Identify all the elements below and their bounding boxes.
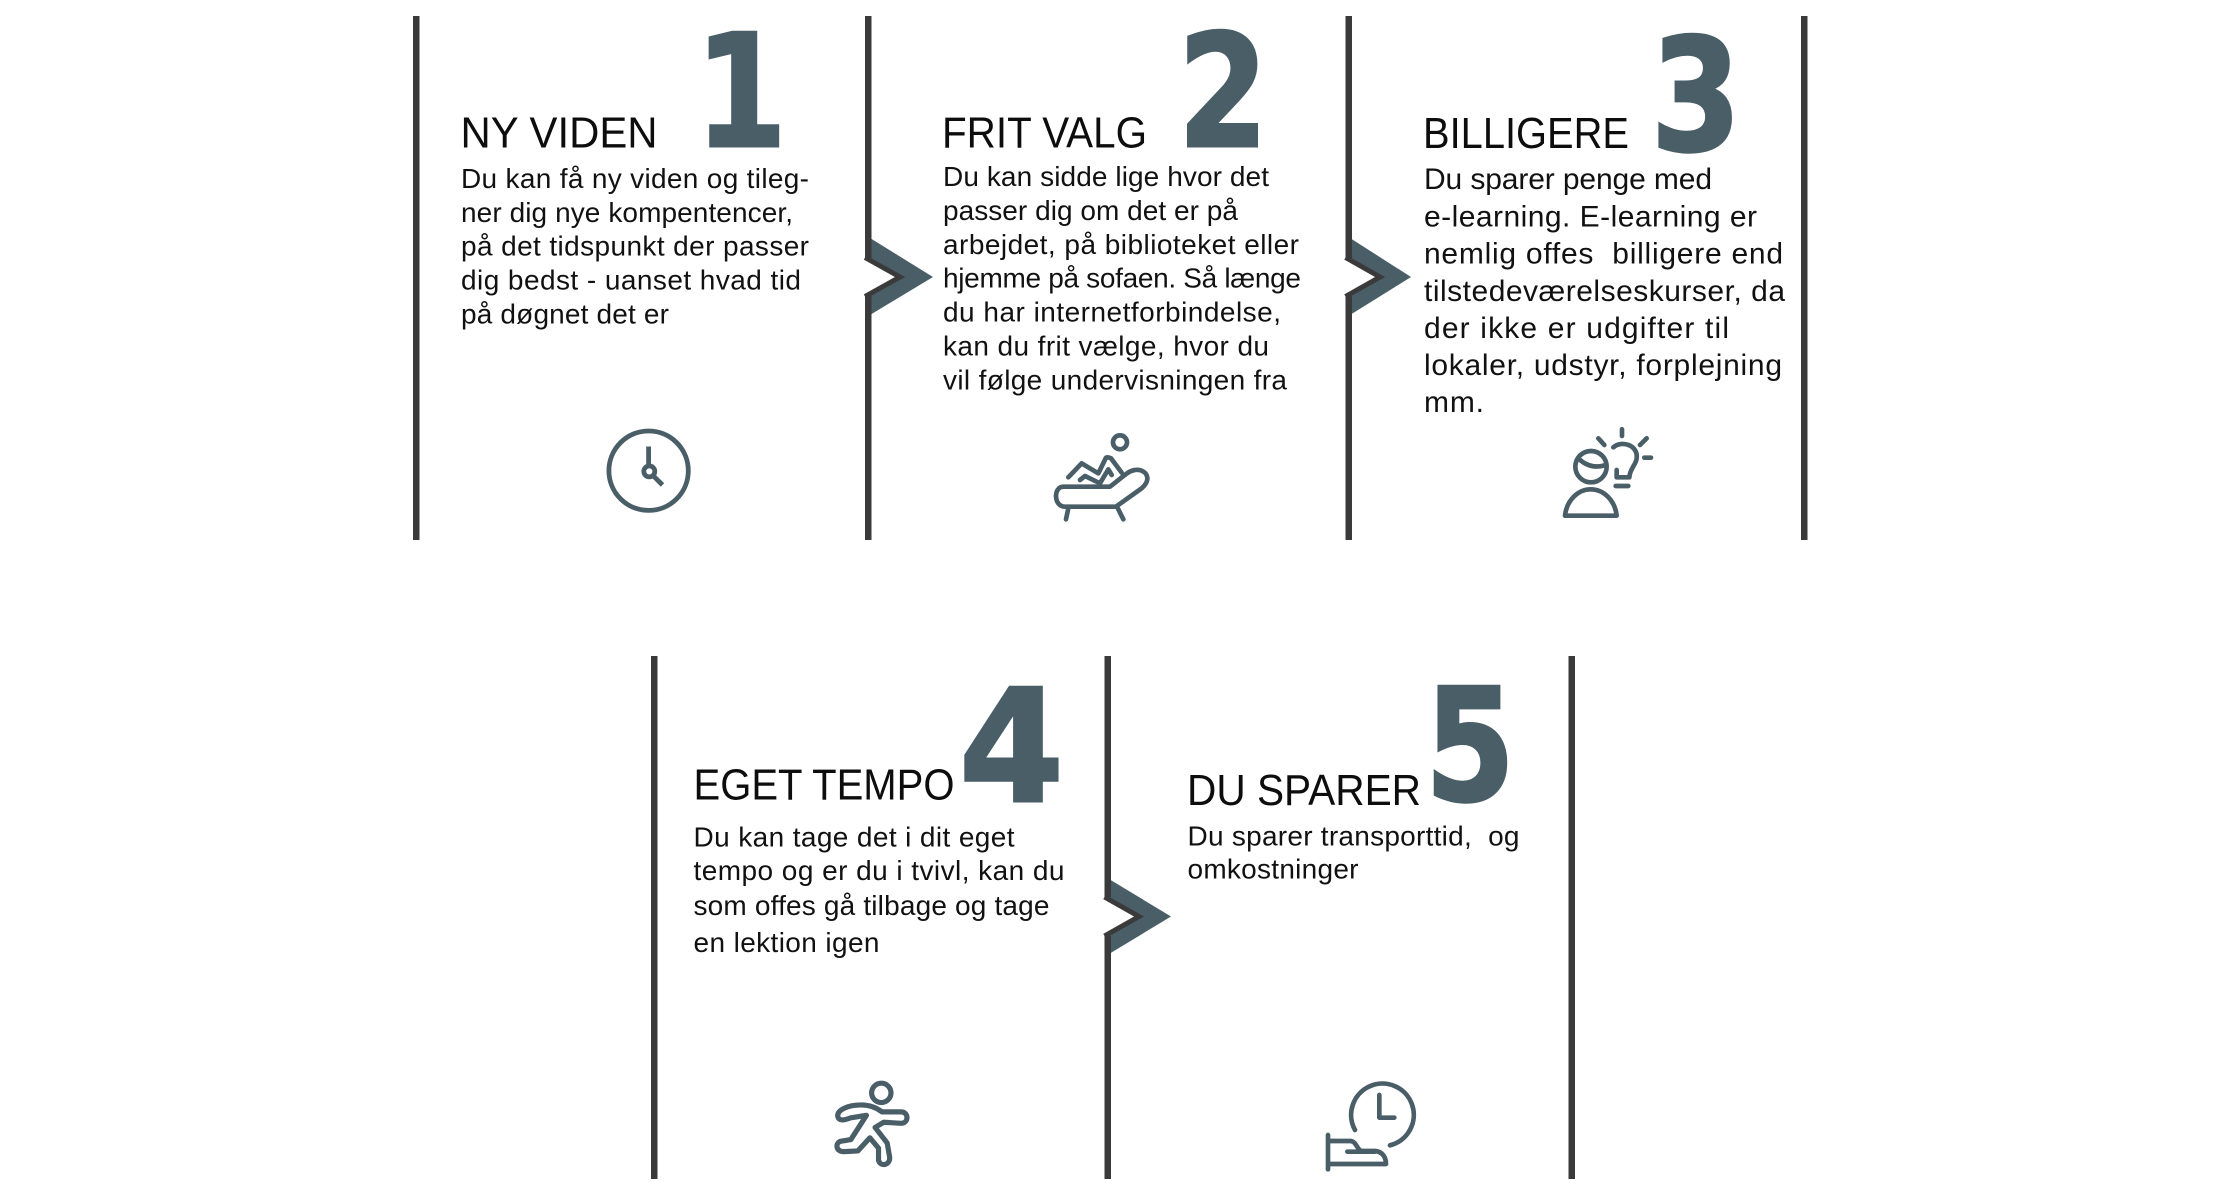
body text 2: passer dig om det er på bbox=[943, 195, 1238, 226]
icon: running person bbox=[837, 1083, 907, 1165]
body text 1: på døgnet det er bbox=[461, 298, 669, 330]
heading 4: EGET TEMPO bbox=[694, 761, 954, 810]
divider line: left of panel 4 bbox=[651, 656, 658, 1179]
divider line with arrow: panel 4 to 5 bbox=[1104, 656, 1171, 1179]
body text 3: Du sparer penge med bbox=[1424, 163, 1712, 196]
body text 3: der ikke er udgifter til bbox=[1424, 312, 1729, 345]
body text 5 bbox=[1188, 820, 1520, 884]
heading 5: DU SPARER bbox=[1187, 766, 1421, 815]
body text 4: som offes gå tilbage og tage bbox=[694, 890, 1050, 921]
body text 4 bbox=[694, 822, 1064, 958]
body text 2: kan du frit vælge, hvor du bbox=[943, 330, 1269, 362]
panel 5: du sparer bbox=[1187, 655, 1520, 1169]
panel 2: frit valg bbox=[942, 1, 1301, 519]
body text 2: du har internetforbindelse, bbox=[943, 296, 1281, 328]
panel 4: eget tempo bbox=[694, 656, 1064, 1165]
panel 3: billigere bbox=[1423, 5, 1785, 516]
body text 1: Du kan få ny viden og tileg- bbox=[461, 163, 809, 194]
body text 5: Du sparer transporttid, og bbox=[1188, 820, 1520, 852]
body text 1: dig bedst - uanset hvad tid bbox=[461, 264, 801, 296]
divider line: left of panel 1 bbox=[413, 16, 420, 540]
body text 2: Du kan sidde lige hvor det bbox=[943, 161, 1269, 192]
divider line: right of panel 3 bbox=[1801, 16, 1808, 540]
body text 3: lokaler, udstyr, forplejning bbox=[1424, 349, 1782, 382]
heading 1: NY VIDEN bbox=[460, 108, 658, 158]
number 1: 1 bbox=[695, 1, 787, 183]
number 5: 5 bbox=[1425, 655, 1515, 837]
icon: clock bbox=[609, 431, 688, 510]
body text 3: tilstedeværelseskurser, da bbox=[1424, 275, 1785, 308]
body text 1 bbox=[461, 163, 809, 330]
body text 4: en lektion igen bbox=[694, 927, 880, 958]
body text 5: omkostninger bbox=[1188, 854, 1358, 884]
body text 3 bbox=[1424, 163, 1785, 419]
body text 3: mm. bbox=[1424, 386, 1484, 419]
body text 1: ner dig nye kompentencer, bbox=[461, 197, 793, 228]
icon: person on sofa bbox=[1056, 435, 1147, 519]
number 4: 4 bbox=[959, 656, 1064, 838]
body text 3: e-learning. E-learning er bbox=[1424, 200, 1757, 234]
body text 2: arbejdet, på biblioteket eller bbox=[943, 229, 1299, 260]
body text 1: på det tidspunkt der passer bbox=[461, 230, 809, 262]
icon: clock over hand bbox=[1328, 1084, 1414, 1169]
divider line: right of panel 5 bbox=[1568, 656, 1575, 1179]
heading 3: BILLIGERE bbox=[1423, 109, 1629, 158]
body text 4: Du kan tage det i dit eget bbox=[694, 822, 1015, 852]
number 3: 3 bbox=[1651, 5, 1741, 187]
panel 1: ny viden bbox=[460, 1, 809, 510]
body text 4: tempo og er du i tvivl, kan du bbox=[694, 855, 1064, 886]
heading 2: FRIT VALG bbox=[942, 108, 1147, 158]
divider line with arrow: panel 1 to 2 bbox=[865, 16, 933, 540]
icon: person with light bulb bbox=[1565, 429, 1651, 516]
body text 3: nemlig offes billigere end bbox=[1424, 238, 1783, 270]
number 2: 2 bbox=[1178, 1, 1268, 183]
body text 2: vil følge undervisningen fra bbox=[943, 364, 1287, 396]
divider line with arrow: panel 2 to 3 bbox=[1346, 16, 1411, 540]
body text 2 bbox=[943, 161, 1301, 396]
body text 2: hjemme på sofaen. Så længe bbox=[943, 262, 1301, 294]
